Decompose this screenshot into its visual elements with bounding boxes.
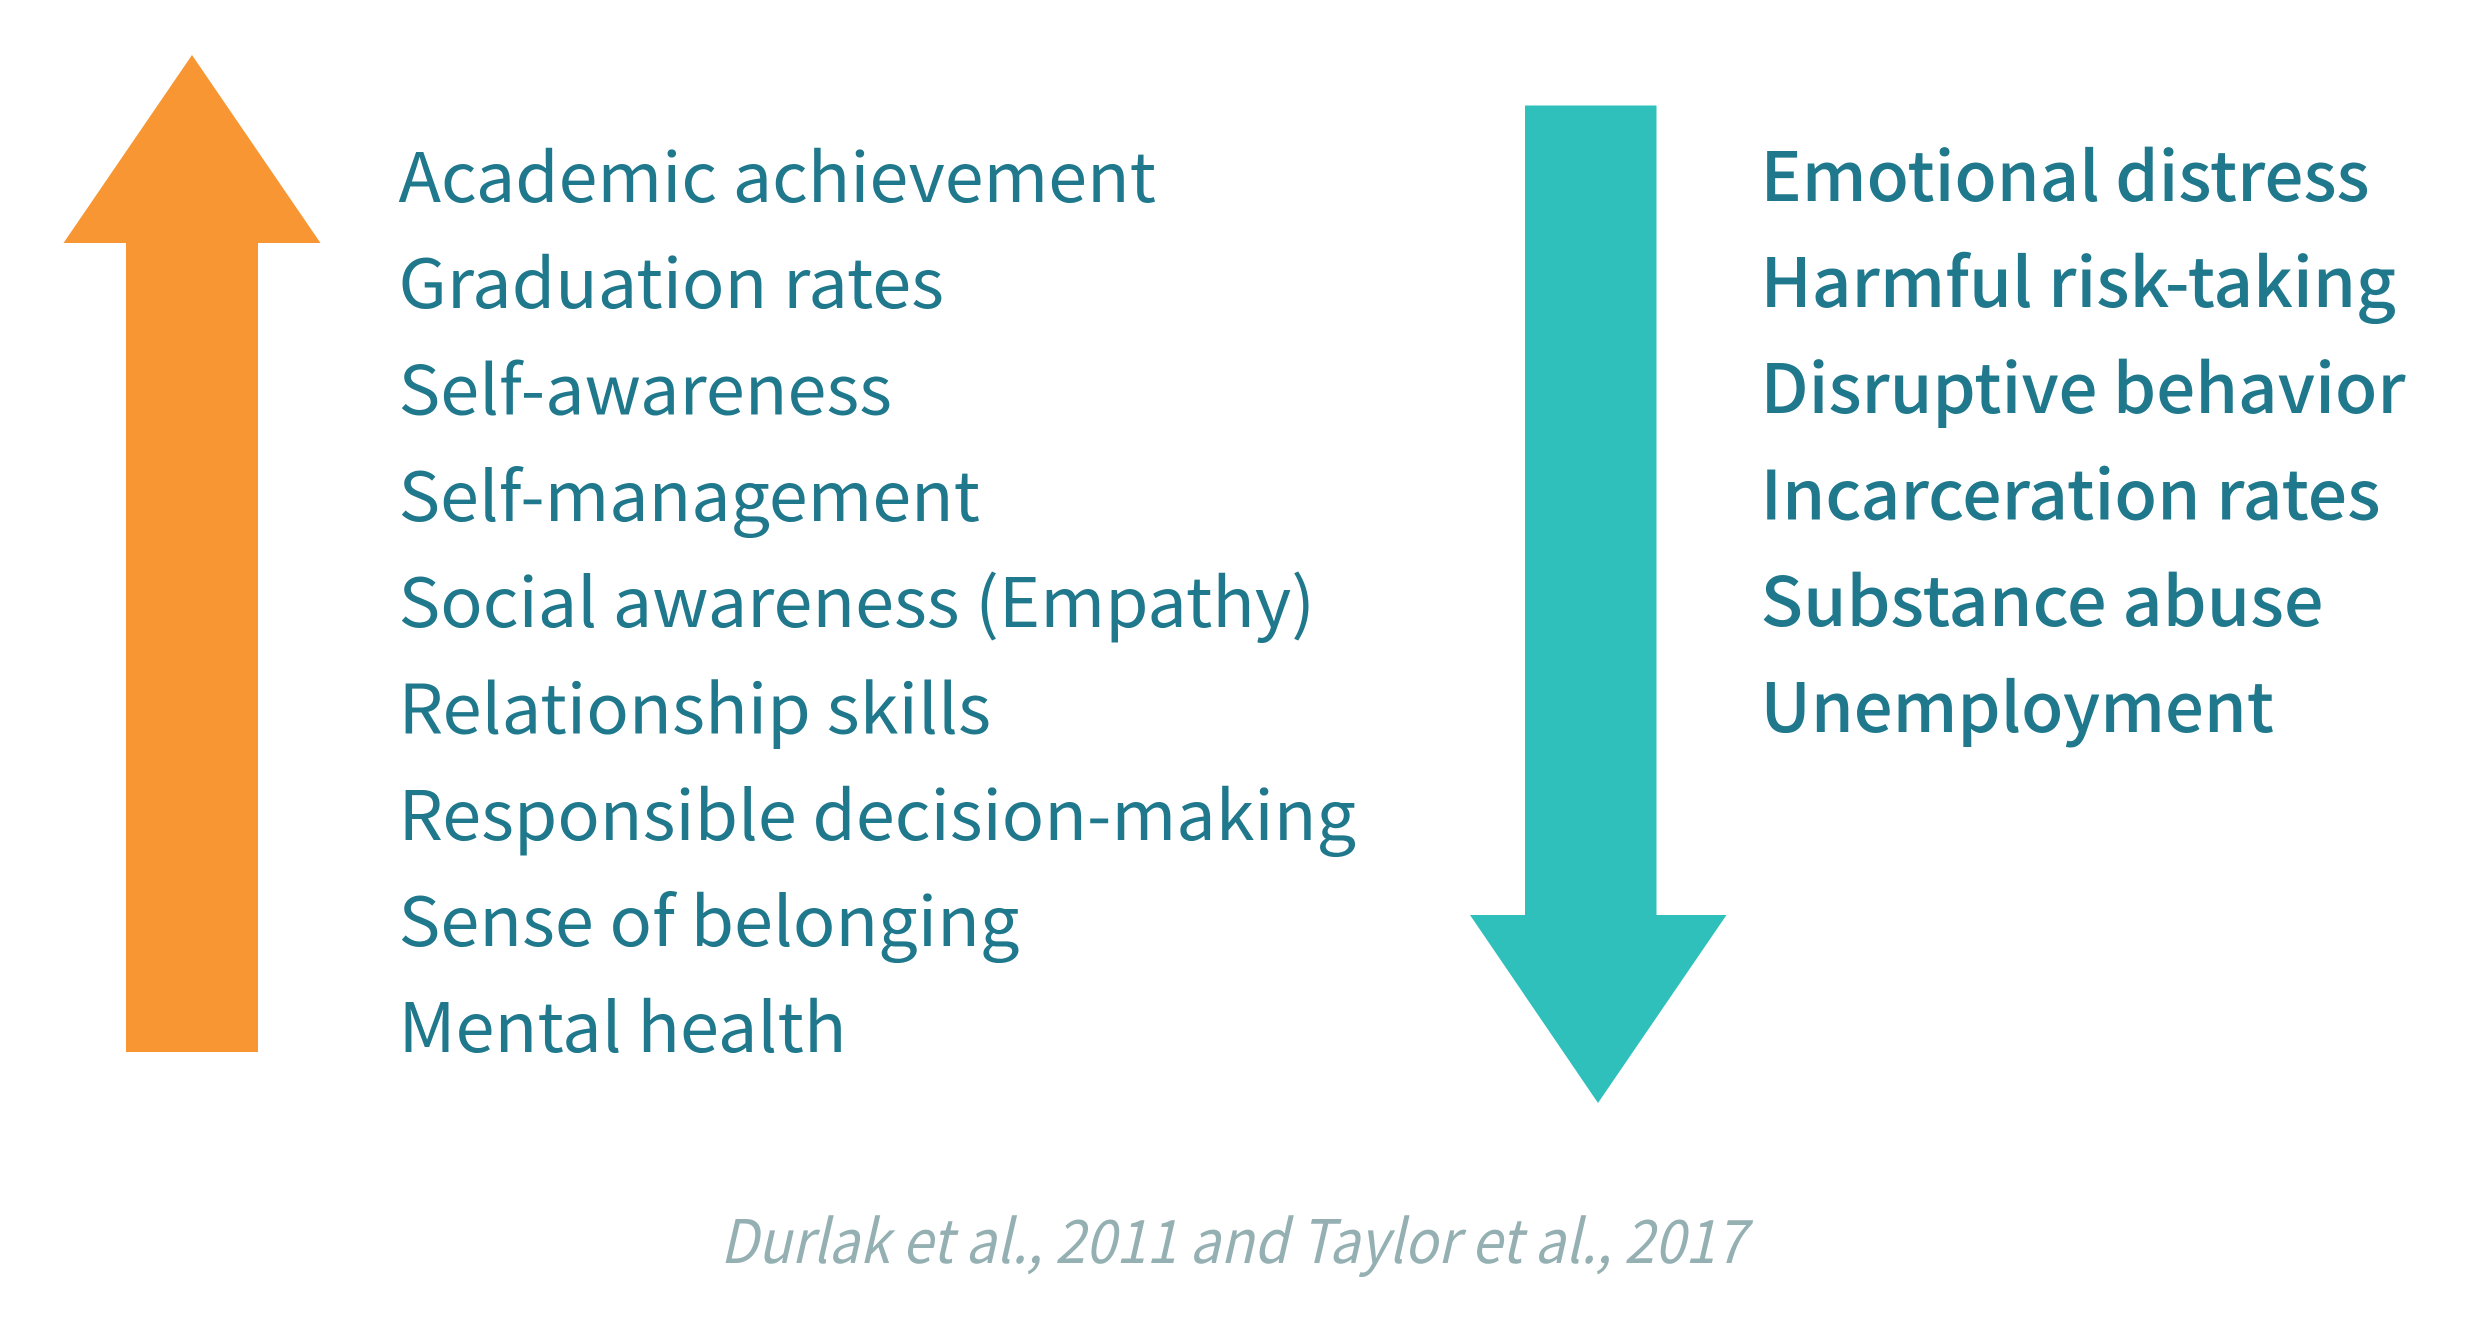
item: relationship skills: Relationship skills: [398, 654, 991, 754]
item: self-management: Self-management: [398, 442, 980, 541]
item: harmful risk-taking: Harmful risk-taking: [1760, 228, 2396, 327]
item: disruptive behavior: Disruptive behavior: [1760, 334, 2406, 433]
list: outcomes that decrease: [1760, 122, 2406, 752]
list: outcomes that increase: [398, 123, 1356, 1072]
citation: Durlak et al., 2011 and Taylor et al., 2017: [720, 1194, 1754, 1281]
item: academic achievement: Academic achievement: [398, 123, 1156, 222]
item: graduation rates: Graduation rates: [398, 229, 944, 328]
item: incarceration rates: Incarceration rates: [1760, 440, 2380, 540]
icon: teal down arrow: [1470, 106, 1726, 1103]
item: sense of belonging: Sense of belonging: [398, 867, 1020, 966]
item: emotional distress: Emotional distress: [1760, 122, 2370, 221]
item: responsible decision-making: Responsible decision-making: [398, 761, 1356, 860]
item: social awareness: Social awareness (Empathy): [398, 548, 1315, 647]
item: substance abuse: Substance abuse: [1760, 547, 2324, 646]
item: mental health: Mental health: [398, 973, 846, 1072]
item: unemployment: Unemployment: [1760, 653, 2274, 752]
icon: orange up arrow: [64, 55, 320, 1052]
item: self-awareness: Self-awareness: [398, 336, 892, 434]
